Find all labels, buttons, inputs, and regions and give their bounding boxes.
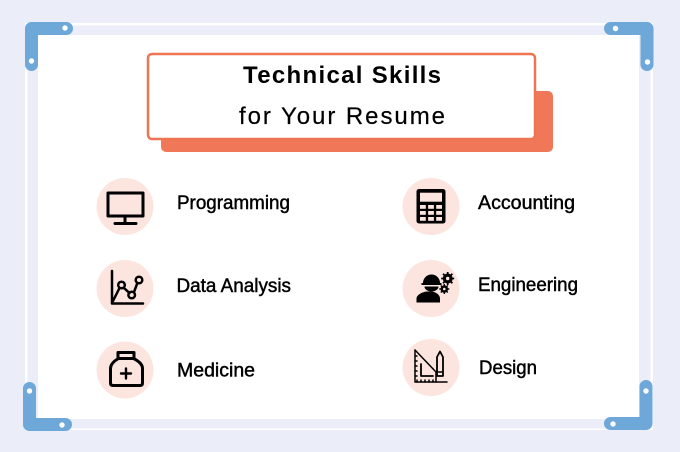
corner bracket: bottom right — [610, 386, 649, 427]
icon: monitor — [108, 193, 143, 224]
skill: medicine: Medicine — [177, 360, 255, 382]
skill: design: Design — [479, 358, 537, 379]
title banner — [148, 54, 553, 152]
title line 1: Technical Skills — [243, 62, 441, 89]
skill: data analysis — [96, 260, 291, 317]
corner bracket: top right — [610, 26, 650, 65]
corner bracket: top left — [29, 25, 68, 64]
skill: design — [402, 339, 537, 396]
corner bracket: bottom left — [27, 388, 66, 428]
title line 2: for Your Resume — [239, 103, 445, 130]
banner box — [148, 54, 535, 139]
icon: calculator — [416, 189, 446, 224]
skill: medicine — [96, 342, 255, 398]
skill: accounting — [402, 178, 575, 235]
skill: programming — [96, 178, 290, 235]
skill: data analysis: Data Analysis — [176, 276, 291, 297]
skill: engineering — [402, 260, 578, 317]
icon: engineer with gears — [416, 272, 454, 302]
icon: medicine bottle — [110, 352, 142, 386]
icon: set square and pencil — [415, 350, 447, 382]
skill: accounting: Accounting — [478, 193, 575, 214]
icon: line chart — [112, 271, 143, 304]
skill: engineering: Engineering — [478, 275, 578, 296]
skill: programming: Programming — [177, 193, 290, 214]
banner shadow — [161, 91, 553, 152]
